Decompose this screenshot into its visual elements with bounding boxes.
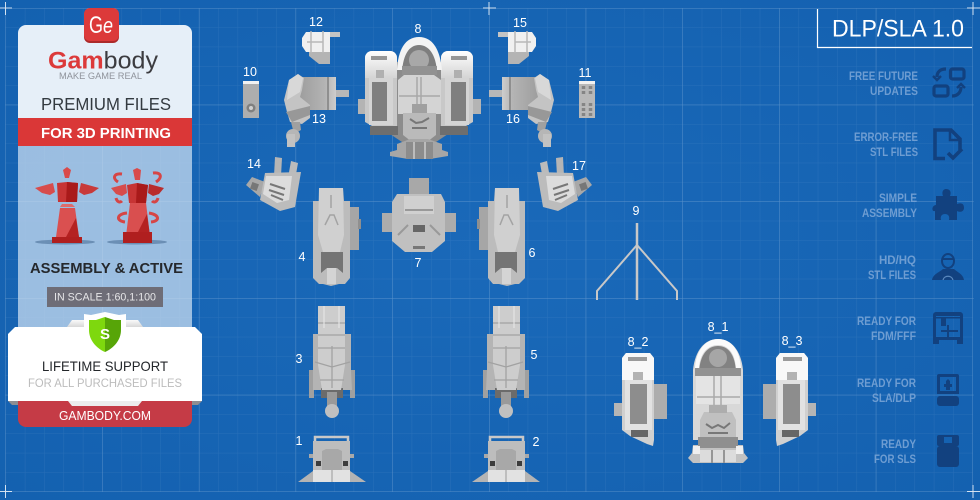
feature: ready for SLS <box>874 435 959 467</box>
part 11: peg block <box>579 81 595 118</box>
feature: free future updates <box>849 69 965 98</box>
badge: in scale: IN SCALE 1:60,1:100 <box>54 292 156 304</box>
feature: ready for FDM/FFF: FDM/FFF <box>871 331 916 343</box>
version tag: DLP/SLA 1.0: DLP/SLA 1.0 <box>832 16 964 42</box>
part 7: hip <box>382 178 456 252</box>
tagline: MAKE GAME REAL <box>59 71 142 82</box>
icon: SLS printer <box>937 435 959 467</box>
version tag: DLP/SLA 1.0 <box>818 9 972 48</box>
feature: simple assembly <box>862 189 964 220</box>
icon: person bust <box>932 254 964 280</box>
part number labels: 8 <box>415 22 422 36</box>
part number labels: 17 <box>572 159 586 173</box>
panel middle: translucent figures area <box>18 146 192 336</box>
part number labels: 3 <box>296 352 303 366</box>
bottom red strip <box>18 400 192 427</box>
backing <box>390 62 448 142</box>
part 3: left leg lower <box>309 306 355 418</box>
badge: in scale <box>47 287 163 307</box>
feature: ready for SLA/DLP: SLA/DLP <box>872 393 916 405</box>
icon: shield: S <box>100 326 110 343</box>
part 15: shoulder plate mirrored <box>498 31 536 64</box>
feature: error-free STL files <box>854 129 962 159</box>
part number labels: 5 <box>531 348 538 362</box>
feature: ready for FDM/FFF: READY FOR <box>857 316 917 328</box>
feature: HD/HQ STL files <box>868 254 964 282</box>
banner: for 3D printing <box>18 118 192 146</box>
part 4: left leg upper <box>313 188 361 286</box>
feature: simple assembly: SIMPLE <box>879 193 917 205</box>
heading: assembly and active: ASSEMBLY & ACTIVE <box>30 261 183 277</box>
card: lifetime support: FOR ALL PURCHASED FILES <box>28 376 182 390</box>
part 13: arm <box>284 74 349 147</box>
feature: simple assembly: ASSEMBLY <box>862 208 917 220</box>
part 8_3: right pack <box>763 353 816 446</box>
part 5: right leg lower <box>483 306 529 418</box>
part number labels: 1 <box>296 434 303 448</box>
icon: FDM printer <box>933 312 963 344</box>
part number labels: 7 <box>415 256 422 270</box>
icon: Ge logo: e <box>103 13 113 38</box>
part 8: torso assembly <box>358 37 481 159</box>
icon: puzzle piece <box>932 189 964 220</box>
part number labels: 14 <box>247 157 261 171</box>
part 14: hand <box>246 157 301 211</box>
lower panel <box>403 113 436 142</box>
icon: shield <box>84 312 126 354</box>
feature: ready for FDM/FFF <box>857 312 963 344</box>
feature: HD/HQ STL files: STL FILES <box>868 270 916 282</box>
side tabs <box>358 99 366 114</box>
part 8_1: cockpit <box>688 339 748 463</box>
card: lifetime support <box>8 312 202 406</box>
chest <box>398 75 441 114</box>
part number labels: 15 <box>513 16 527 30</box>
part 10: small block <box>243 81 259 118</box>
part number labels: 6 <box>529 246 536 260</box>
part number labels: 12 <box>309 15 323 29</box>
icon: Ge logo <box>84 8 119 43</box>
part number labels: 2 <box>533 435 540 449</box>
part 17: hand mirrored <box>537 157 592 211</box>
helmet dome <box>397 37 442 70</box>
feature: free future updates: UPDATES <box>870 86 918 98</box>
bottom red strip: GAMBODY.COM <box>59 408 151 423</box>
icon: file check <box>935 129 962 158</box>
part number labels: 13 <box>312 112 326 126</box>
icon: Ge logo: G <box>89 12 103 39</box>
panel top: logo area <box>18 25 192 118</box>
part 1: left foot <box>298 437 366 482</box>
part 12: shoulder plate <box>302 31 340 64</box>
panel: Gambody sidebar <box>8 8 202 427</box>
feature: ready for SLA/DLP: READY FOR <box>857 378 917 390</box>
icon: SLA printer <box>937 374 959 406</box>
part number labels: 8_2 <box>628 335 648 349</box>
figure: active pose with arrows <box>107 168 167 244</box>
part number labels: 8_1 <box>708 320 728 334</box>
heading: Gambody wordmark: Gambody <box>48 48 158 74</box>
part number labels: 10 <box>243 65 257 79</box>
part number labels: 16 <box>506 112 520 126</box>
icon: swap <box>933 69 965 96</box>
card: lifetime support: LIFETIME SUPPORT <box>42 358 168 374</box>
feature: free future updates: FREE FUTURE <box>849 71 918 83</box>
part number labels: 8_3 <box>782 334 802 348</box>
feature: error-free STL files: ERROR-FREE <box>854 132 918 144</box>
part 9: antenna <box>597 223 677 300</box>
part number labels: 11 <box>579 66 592 80</box>
part number labels: 4 <box>299 250 306 264</box>
part 6: right leg upper <box>477 188 525 286</box>
feature: ready for SLA/DLP <box>857 374 959 406</box>
feature: ready for SLS: READY <box>881 439 916 451</box>
feature: ready for SLS: FOR SLS <box>874 454 916 466</box>
part number labels <box>243 15 802 449</box>
heading: premium files: PREMIUM FILES <box>41 94 171 114</box>
part number labels: 9 <box>633 204 640 218</box>
part 16: arm mirrored <box>489 74 554 147</box>
part 8_2: left pack <box>614 353 667 446</box>
banner: for 3D printing: FOR 3D PRINTING <box>41 125 171 142</box>
left pack <box>365 51 398 135</box>
pelvis <box>390 139 448 159</box>
part 2: right foot <box>472 437 540 482</box>
figure: assembly pose <box>35 167 99 244</box>
feature: HD/HQ STL files: HD/HQ <box>879 255 916 267</box>
feature: error-free STL files: STL FILES <box>870 147 918 159</box>
